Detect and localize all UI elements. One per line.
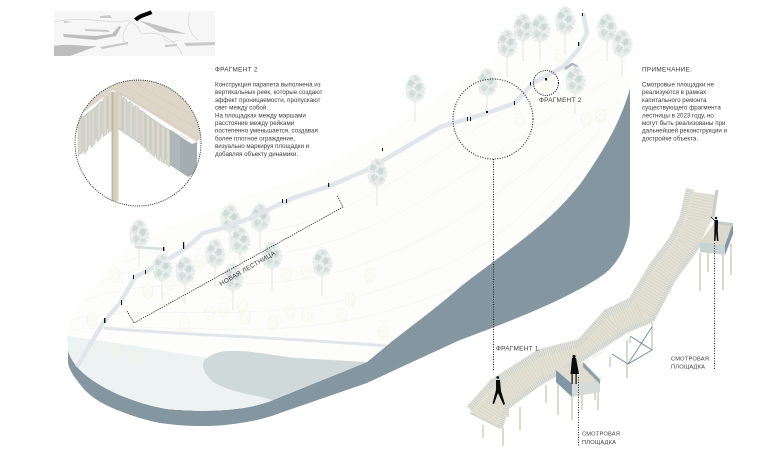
text block: fragment 2 description: более плотное ограждение, [215,135,295,142]
text block: note: могут быть реализованы при [642,120,726,127]
person pointing [711,217,718,241]
stair deck [470,192,717,428]
road [104,328,387,346]
contour lines [70,50,625,330]
heading: fragment 2: ФРАГМЕНТ 2 [215,66,258,74]
terrain surface [67,48,630,411]
terrain side: slate blue edge [68,88,630,426]
text block: note: капитального ремонта [642,97,707,104]
text block: fragment 2 description: свет между собой. [215,105,268,112]
person walking [492,376,505,405]
text block: note: достройке объекта. [642,135,698,142]
person in dress [570,355,579,384]
people on the path [104,13,583,323]
text block: fragment 2 description: добавляя объекту динамики. [215,151,298,158]
text block: fragment 2 description: визуально маркируя площадки и [215,143,310,150]
text block: fragment 2 description: вертикальных реек, которые создают [215,89,323,96]
pond [203,351,367,400]
shrubs [87,313,97,327]
text block: note: Смотровые площадки не [642,82,715,88]
upper viewing platform [700,221,733,255]
dotted leader line to fragment 1 [492,159,494,370]
text block: fragment 2 description: Конструкция парапета выполнена из [215,82,321,88]
post [112,92,118,201]
label: fragment 1: ФРАГМЕНТ 1 [496,346,539,352]
isometric staircase [470,189,733,446]
lower viewing platform [556,362,602,397]
shadow backing of slats [78,92,170,163]
text block: fragment 2 description: эффект проницаемости, пропускают [215,97,321,104]
text block: note: лестницы в 2023 году, но [642,112,714,119]
fragment 1 marker circle [453,79,533,159]
text block: note: существующего фрагмента [642,105,721,112]
braces [612,327,652,364]
far railing [470,189,690,409]
dotted leader: upper platform [714,243,716,370]
fragment 2 marker circle [534,70,558,96]
text block: fragment 2 description: расстояние между рейками [215,120,295,127]
dotted leader: lower platform [578,377,580,447]
label: upper viewing platform: ПЛОЩАДКА [671,364,705,370]
wood deck [83,80,201,142]
text block: note: реализуются в рамках [642,89,707,96]
label: new staircase: НОВАЯ ЛЕСТНИЦА [218,250,277,288]
label: lower viewing platform: СМОТРОВАЯ [582,432,620,438]
label: fragment 2: ФРАГМЕНТ 2 [539,97,582,104]
heading: note: ПРИМЕЧАНИЕ: [642,66,692,74]
bracket: new staircase extent [127,195,343,323]
new staircase path on the slope [77,13,587,367]
label: lower viewing platform: ПЛОЩАДКА [582,440,616,446]
trees behind the path [129,5,632,287]
near railing [500,243,700,428]
icon: map location marker [136,12,152,20]
trees in front of the path [152,65,585,311]
text block: fragment 2 description: постепенно уменьшается, создавая [215,128,318,135]
lower ground [67,336,205,411]
text block: note: дальнейшей реконструкции и [642,128,728,135]
slats [78,92,170,167]
label: upper viewing platform: СМОТРОВАЯ [671,356,709,362]
detail circle: railing slats [70,78,206,208]
location map [54,11,215,56]
posts [483,243,731,446]
text block: fragment 2 description: На площадках между маршами [215,112,306,119]
